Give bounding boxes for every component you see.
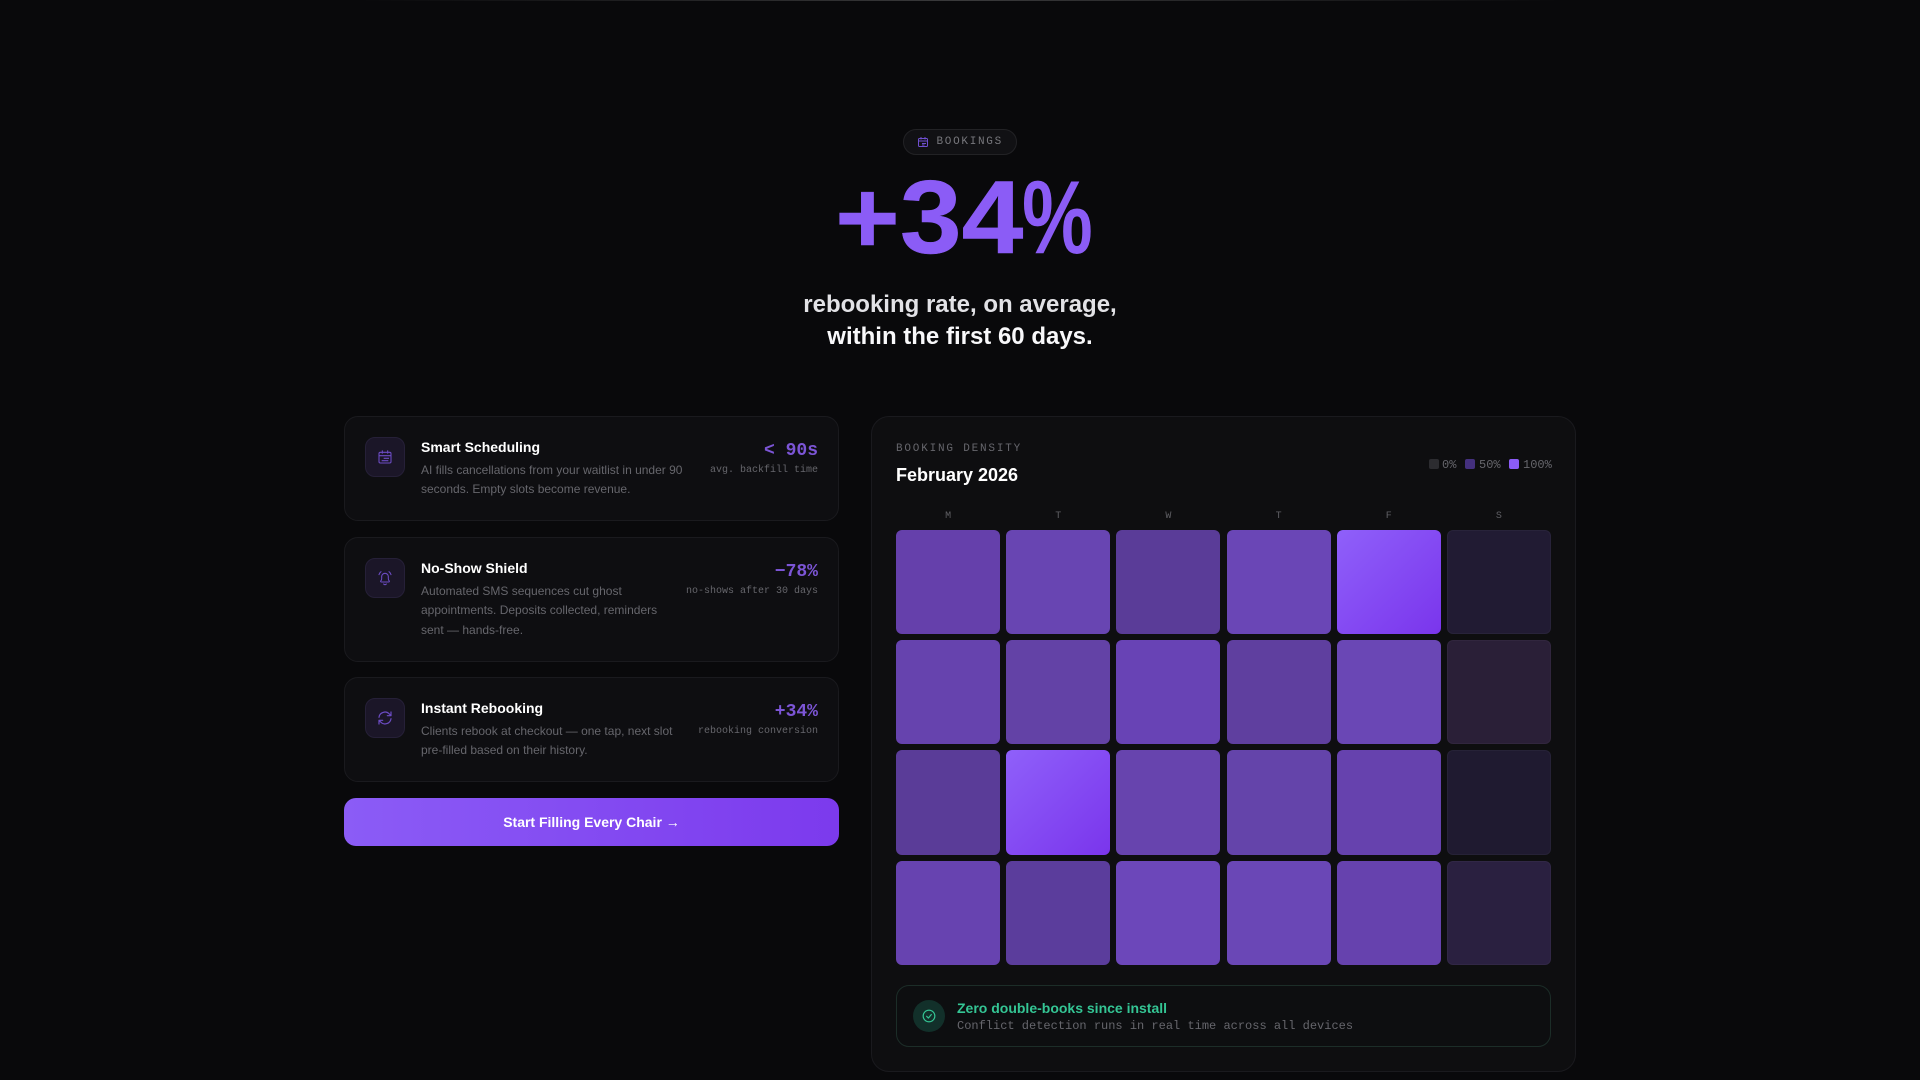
feature description [421,463,682,496]
feature description [421,584,657,637]
panel: no-show shield [344,537,839,662]
panel: booking density: M [945,511,951,522]
headline stat: % [1022,160,1092,276]
icon: refresh [365,698,405,738]
panel: instant rebooking [344,677,839,782]
stat label: rebooking conversion [698,726,818,737]
callout detail: Conflict detection runs in real time across all devices [957,1019,1353,1033]
call to action button [344,798,839,846]
feature description: Automated SMS sequences cut ghost [421,584,622,598]
panel: booking density: S [1496,511,1502,522]
stat value: < 90s [764,441,818,461]
feature description [421,724,672,757]
badge: bookings [903,129,1017,155]
legend: 0% [1442,458,1456,472]
panel heading: February 2026 [896,465,1018,485]
panel: smart scheduling [344,416,839,521]
call to action button: Start Filling Every Chair → [503,814,680,830]
subtitle [803,291,1117,350]
panel: booking density: T [1276,511,1282,522]
subtitle: rebooking rate, on average, [803,291,1117,318]
icon: calendar [365,437,405,477]
feature title: No-Show Shield [421,560,528,576]
feature description: pre-filled based on their history. [421,743,588,757]
panel: booking density: W [1165,511,1171,522]
feature description: AI fills cancellations from your waitlist in under 90 [421,463,682,477]
callout: zero double-books [896,985,1551,1047]
feature title: Smart Scheduling [421,439,540,455]
stat value: −78% [775,562,818,582]
legend: 100% [1523,458,1552,472]
headline stat: +34 [835,160,1023,276]
feature description: Clients rebook at checkout — one tap, next slot [421,724,672,738]
icon: check circle [913,1000,945,1032]
icon: bell [365,558,405,598]
callout title: Zero double-books since install [957,1000,1167,1016]
panel label: BOOKING DENSITY [896,443,1022,455]
stat label: avg. backfill time [710,465,818,476]
heatmap grid [896,530,1551,965]
subtitle: within the first 60 days. [827,323,1093,350]
panel: booking density: T [1055,511,1061,522]
badge text: BOOKINGS [936,136,1003,148]
feature description: seconds. Empty slots become revenue. [421,482,630,496]
day labels [945,511,1502,522]
feature description: appointments. Deposits collected, reminders [421,603,657,617]
stat value: +34% [775,702,818,722]
feature title: Instant Rebooking [421,700,543,716]
panel: booking density: F [1386,511,1392,522]
icon: calendar small [918,137,928,147]
legend: 50% [1479,458,1501,472]
feature description: sent — hands-free. [421,623,523,637]
panel: booking density [871,416,1576,1072]
stat label: no-shows after 30 days [686,586,818,597]
legend [1429,458,1552,472]
